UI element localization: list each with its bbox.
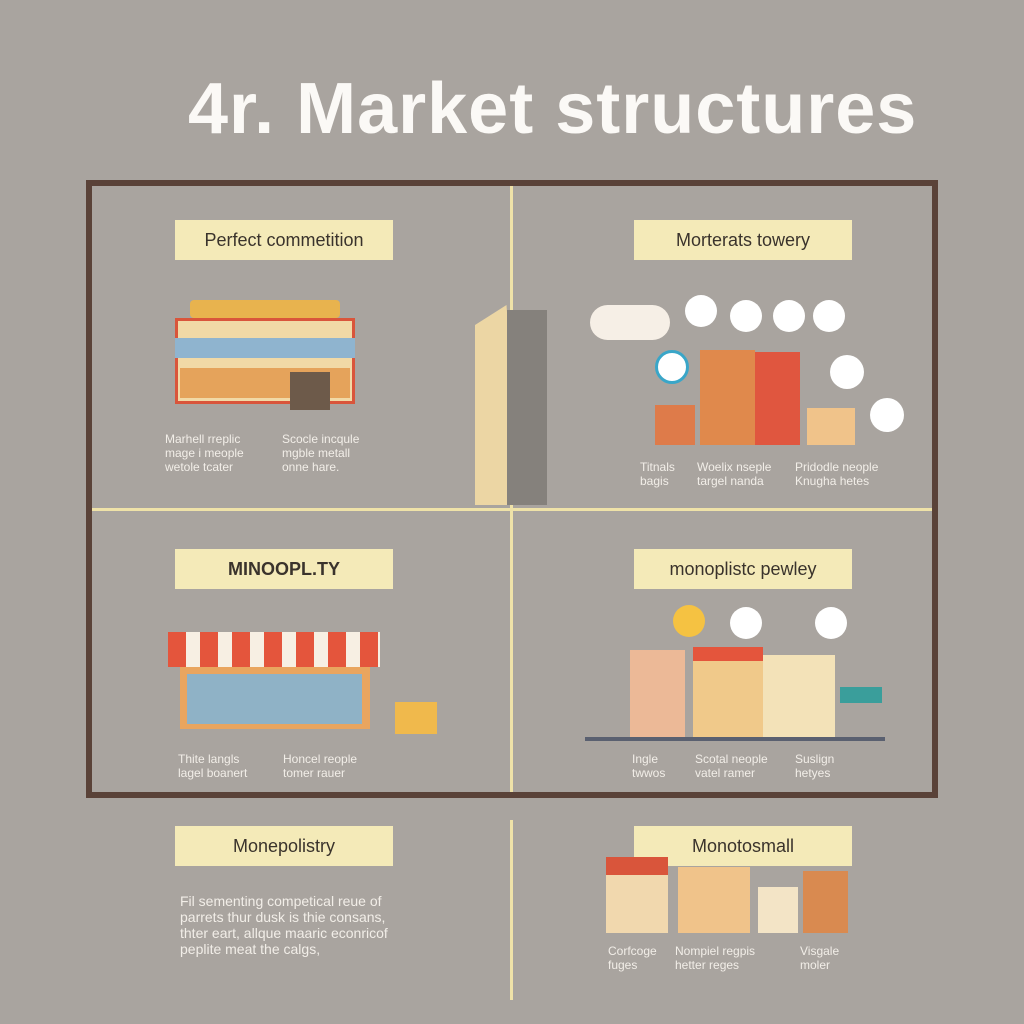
illustration: buildings with logos (590, 295, 904, 445)
text: q3 (178, 752, 248, 780)
text: q6: Corfcoge (608, 944, 657, 958)
text: mgble metall (282, 446, 350, 460)
text: q2 (640, 460, 675, 488)
text: q4: Ingle (632, 752, 658, 766)
label: moderate (634, 220, 852, 260)
label: perfect competition (175, 220, 393, 260)
label: monopolistic (634, 549, 852, 589)
divider vertical (510, 186, 513, 792)
text: q1: wetole tcater (165, 460, 233, 474)
label: monopolistic: monoplistc pewley (669, 559, 817, 579)
illustration: shopping building (175, 300, 355, 410)
text: q6 (608, 944, 657, 972)
text: q3: Thite langls (178, 752, 239, 766)
label: monotosmall (634, 826, 852, 866)
text: Knugha hetes (795, 474, 869, 488)
label: monopoly (175, 549, 393, 589)
text: onne hare. (282, 460, 339, 474)
text: q2: Titnals (640, 460, 675, 474)
illustration: tower (475, 305, 547, 505)
text: tomer rauer (283, 766, 345, 780)
divider lower (510, 820, 513, 1000)
label: monepolistry: Monepolistry (233, 836, 335, 856)
text: hetyes (795, 766, 830, 780)
text: q1: Marhell rreplic (165, 432, 240, 446)
text: paragraph: Fil sementing competical reue of (180, 893, 382, 909)
text: targel nanda (697, 474, 764, 488)
illustration: street shops (585, 605, 885, 741)
text: hetter reges (675, 958, 739, 972)
label: perfect competition: Perfect commetition (204, 230, 364, 250)
text: Visgale (800, 944, 839, 958)
text: Honcel reople (283, 752, 357, 766)
text: paragraph: thter eart, allque maaric econricof (180, 925, 388, 941)
text: q4: twwos (632, 766, 665, 780)
text: q2: bagis (640, 474, 669, 488)
text: paragraph: peplite meat the calgs, (180, 941, 320, 957)
text: vatel ramer (695, 766, 755, 780)
label: monepolistry (175, 826, 393, 866)
text: q1 (165, 432, 244, 474)
text: moler (800, 958, 830, 972)
divider horizontal (92, 508, 932, 511)
text: q3: lagel boanert (178, 766, 247, 780)
text: q1: mage i meople (165, 446, 244, 460)
text: Scocle incqule (282, 432, 359, 446)
text: paragraph (180, 893, 388, 957)
text: Suslign (795, 752, 834, 766)
illustration: small shops (606, 857, 848, 933)
label: monotosmall: Monotosmall (692, 836, 794, 856)
text: Woelix nseple (697, 460, 771, 474)
label: monopoly: MINOOPL.TY (228, 559, 340, 579)
text: q4 (632, 752, 665, 780)
text: paragraph: parrets thur dusk is thie consans, (180, 909, 385, 925)
text: Scotal neople (695, 752, 768, 766)
frame (86, 180, 938, 798)
title: 4r. Market structures (188, 69, 917, 149)
text: Nompiel regpis (675, 944, 755, 958)
text: Pridodle neople (795, 460, 878, 474)
label: moderate: Morterats towery (676, 230, 810, 250)
illustration: awning shop (168, 632, 437, 734)
text: q6: fuges (608, 958, 637, 972)
